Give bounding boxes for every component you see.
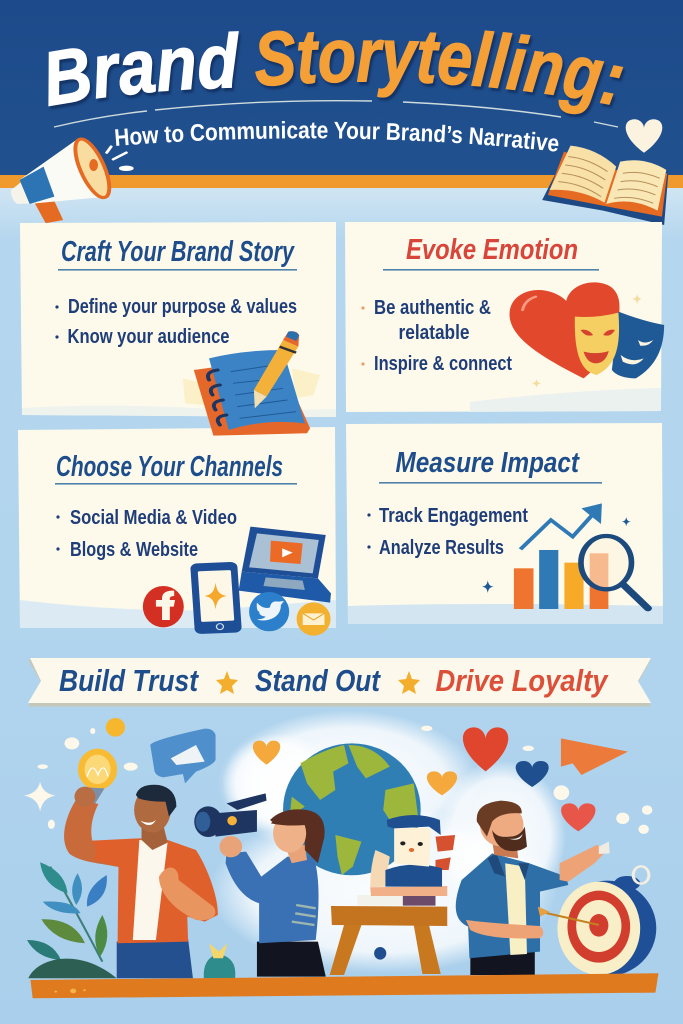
icon: light bulb xyxy=(78,749,117,806)
bullet: track engagement: Track Engagement xyxy=(379,505,528,527)
globe xyxy=(283,743,421,875)
ground bar xyxy=(30,973,658,998)
panel: craft your brand story xyxy=(20,222,336,417)
ribbon banner xyxy=(28,658,651,706)
panel: measure impact xyxy=(346,423,663,624)
icon: heart xyxy=(626,119,662,153)
title: Storytelling: xyxy=(255,30,626,118)
bullet: blogs: Blogs & Website xyxy=(70,539,198,561)
title: Brand xyxy=(48,31,242,110)
bullet: analyze results: Analyze Results xyxy=(379,537,504,559)
person: bearded man with target xyxy=(456,801,610,975)
white cloud backdrop xyxy=(209,710,566,973)
subtitle: How to Communicate Your Brand’s Narrative xyxy=(115,121,558,152)
icon: open book xyxy=(542,146,668,225)
heading: measure impact: Measure Impact xyxy=(396,447,580,479)
bullet: know audience: Know your audience xyxy=(68,326,230,348)
target with arrow xyxy=(538,866,656,976)
header band xyxy=(0,0,683,188)
icon: bar chart with magnifier xyxy=(482,503,648,609)
banner text: drive loyalty: Drive Loyalty xyxy=(436,663,609,698)
icon: laptop, phone and social badges xyxy=(143,527,331,636)
panel: evoke emotion xyxy=(345,222,662,412)
banner text: build trust: Build Trust xyxy=(59,663,199,698)
person: man with light bulb xyxy=(64,785,218,978)
icon: megaphone xyxy=(11,136,134,223)
person: woman with camera xyxy=(194,793,326,977)
title xyxy=(48,30,626,118)
decorative dots and sparkle xyxy=(24,726,652,834)
bullet continuation: relatable: relatable xyxy=(398,322,470,344)
hearts xyxy=(253,727,596,831)
icon: star xyxy=(216,671,238,694)
heading: craft your brand story: Craft Your Brand Story xyxy=(61,236,295,268)
heading: choose your channels: Choose Your Channels xyxy=(56,451,283,483)
heading: evoke emotion: Evoke Emotion xyxy=(406,234,578,266)
icon: chat bubble xyxy=(150,729,216,783)
illustration: team telling a brand story xyxy=(24,710,658,998)
bullet: define purpose: Define your purpose & values xyxy=(68,296,297,318)
table with puppet xyxy=(330,815,455,975)
icon: notebook and pencil xyxy=(183,331,320,436)
bullet: social media: Social Media & Video xyxy=(70,507,237,529)
plant xyxy=(27,862,235,978)
paper plane xyxy=(561,738,628,775)
panel: choose your channels xyxy=(18,427,336,628)
bullet: inspire and connect: Inspire & connect xyxy=(374,353,512,375)
bullet: be authentic: Be authentic & xyxy=(374,297,491,319)
banner text: stand out: Stand Out xyxy=(255,663,381,698)
icon: heart and theatre masks xyxy=(510,282,664,388)
icon: star xyxy=(398,671,420,694)
title arc rule xyxy=(54,101,618,127)
